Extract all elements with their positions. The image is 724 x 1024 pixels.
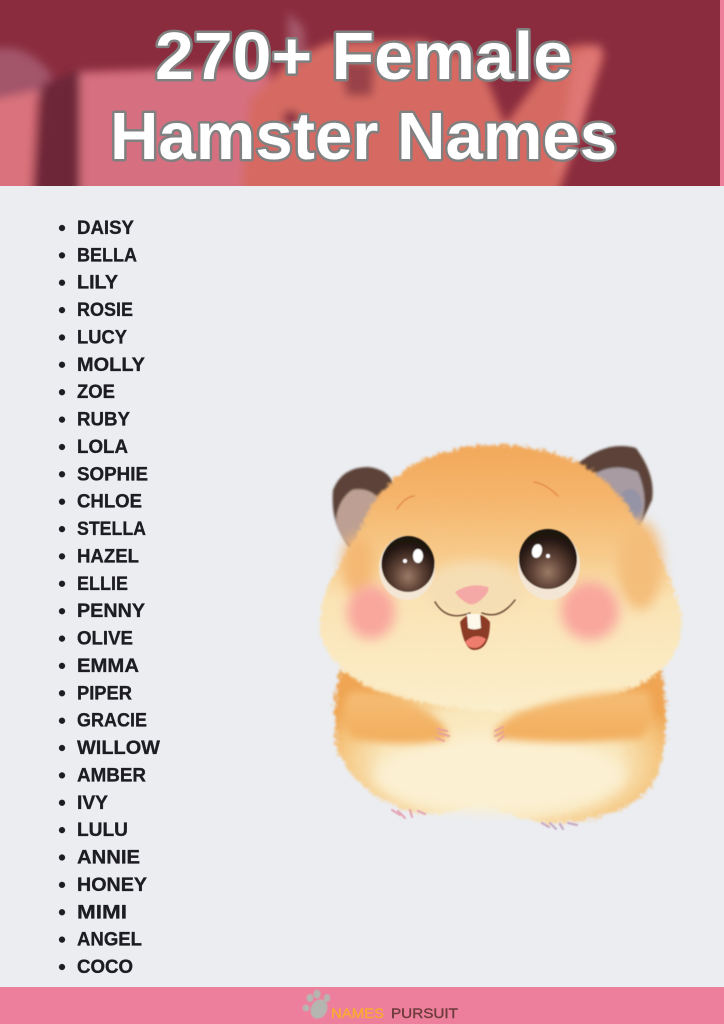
list of hamster names: OLIVE [77,629,133,650]
title [110,19,617,174]
list of hamster names: LILY [77,273,118,294]
list of hamster names: ANNIE [77,848,140,868]
list of hamster names: BELLA [77,245,137,266]
list of hamster names: LOLA [77,437,128,458]
hamster right arm [495,691,652,742]
list of hamster names: CHLOE [77,492,142,513]
logo wordmark: PURSUIT [391,1005,458,1021]
list of hamster names: LUCY [77,328,127,348]
list of hamster names: STELLA [77,519,146,540]
title: Hamster Names [110,99,617,174]
hamster belly [375,737,625,813]
list of hamster names [59,218,160,978]
logo wordmark: NAMES [331,1005,384,1021]
list of hamster names: ROSIE [77,300,133,321]
list of hamster names: HAZEL [77,546,139,567]
list of hamster names: AMBER [77,765,146,786]
hamster cheeks [347,582,619,640]
hamster left foot [392,810,425,818]
title: 270+ Female [155,19,572,94]
list of hamster names: ANGEL [77,930,142,951]
hamster right eye [518,529,580,600]
list of hamster names: PENNY [77,601,145,622]
list of hamster names: MOLLY [77,355,145,376]
header banner with tinted hamster photo [0,0,724,200]
icon: paw logo [303,990,330,1021]
list of hamster names: MIMI [77,902,127,923]
hamster right foot [542,823,577,829]
hamster right side shading [618,520,662,610]
illustration: cute hamster [320,445,682,829]
list of hamster names: ZOE [77,382,115,403]
hamster muzzle [425,562,525,618]
hamster lower body [335,670,666,824]
footer bar [0,987,724,1024]
list of hamster names: WILLOW [77,738,160,759]
hamster right ear [575,446,653,526]
list of hamster names: ELLIE [77,574,128,595]
list of hamster names: COCO [77,957,133,978]
list of hamster names: DAISY [77,218,134,239]
list of hamster names: RUBY [77,410,130,431]
hamster left eye [379,536,435,600]
hamster nose [455,585,488,604]
hamster mouth [435,600,515,650]
hamster eyebrows [397,482,558,509]
list of hamster names: IVY [77,793,108,814]
list of hamster names: EMMA [77,656,139,677]
list of hamster names: SOPHIE [77,464,148,485]
hamster head [320,445,682,711]
list of hamster names: PIPER [77,683,132,704]
list of hamster names: LULU [77,820,128,841]
logo wordmark [331,1005,458,1021]
list of hamster names: GRACIE [77,711,147,732]
hamster left arm [343,692,447,744]
hamster left side shading [342,535,374,595]
list of hamster names: HONEY [77,875,147,896]
hamster left ear [333,467,395,548]
hamster paws [436,727,504,741]
